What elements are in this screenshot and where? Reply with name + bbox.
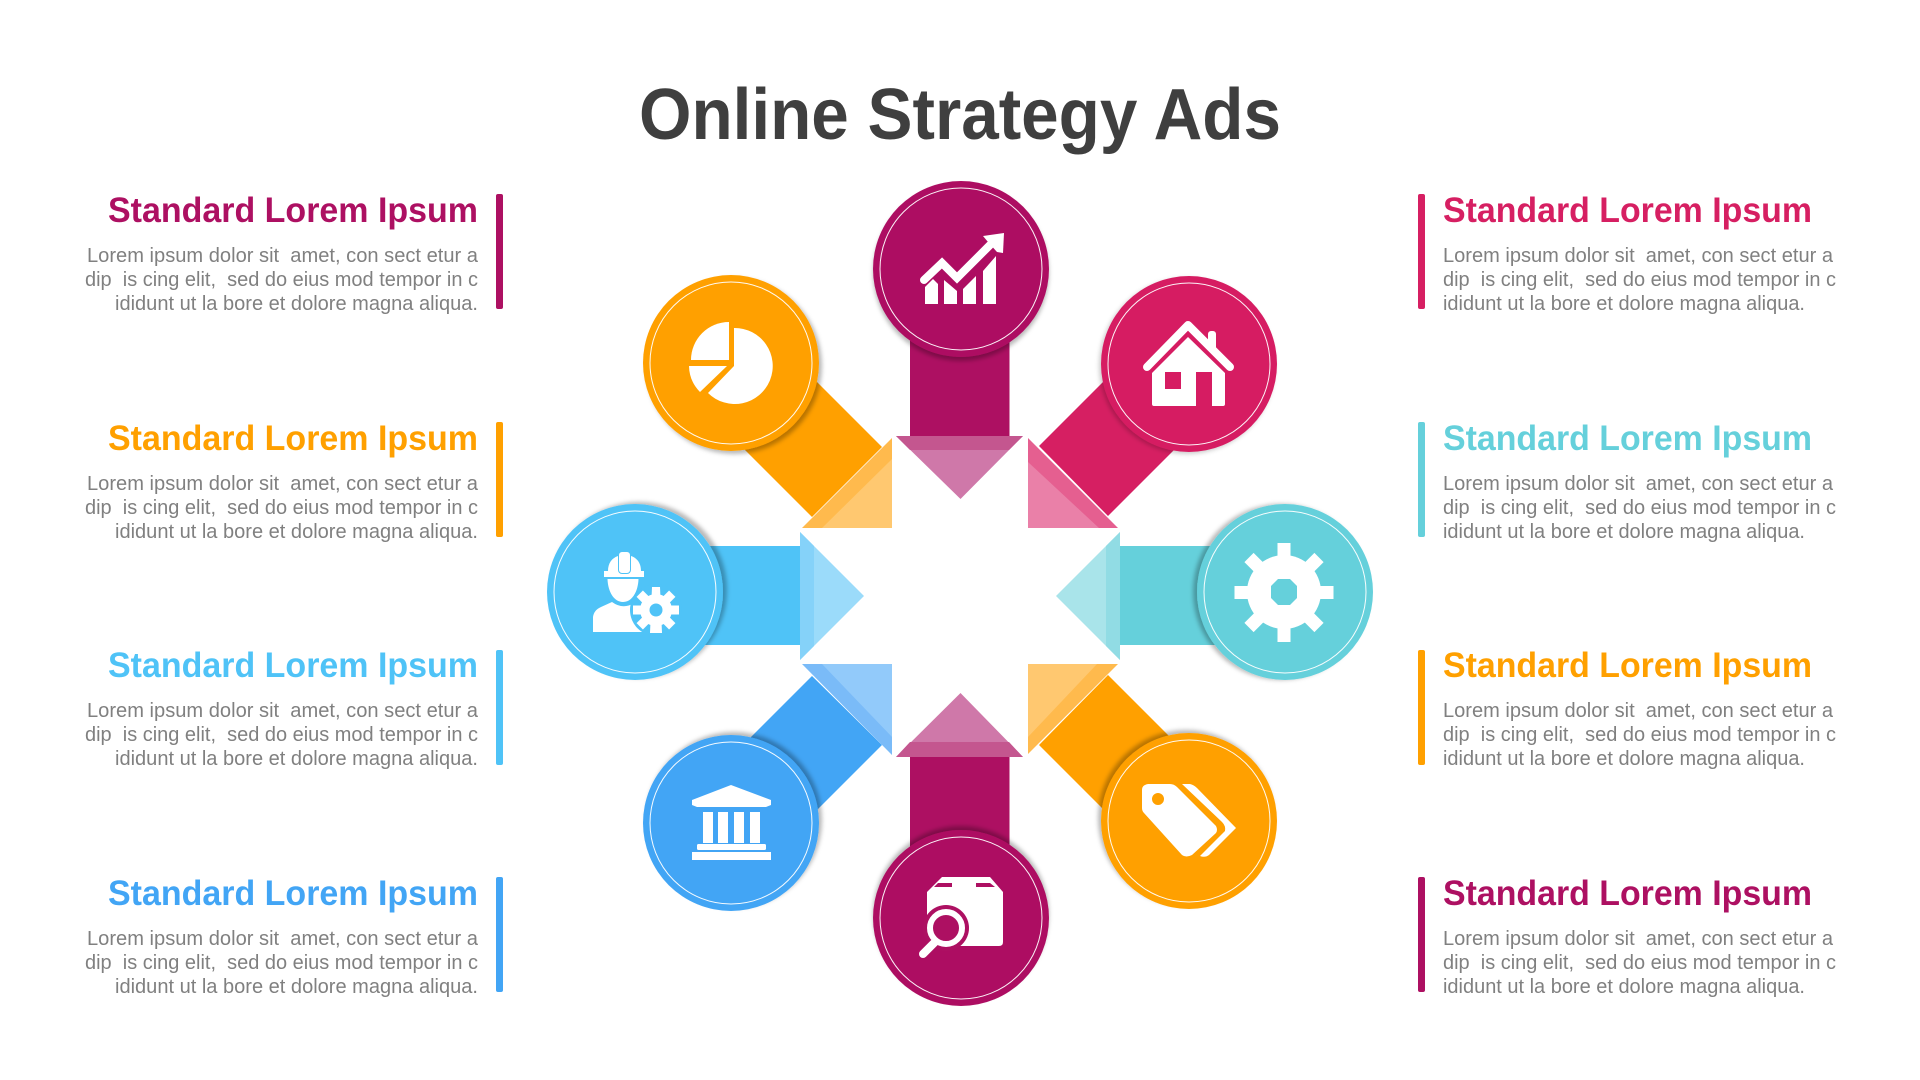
- text block: left 3: Standard Lorem Ipsum: [108, 646, 478, 685]
- bar: left: [680, 546, 800, 645]
- text block: left 2: dip is cing elit, sed do eius mod tempor in c: [85, 497, 478, 519]
- title: Online Strategy Ads: [639, 75, 1281, 155]
- panel: spoke bottom (magenta box search): [873, 693, 1049, 1006]
- icon: package with magnifier: [923, 877, 1003, 954]
- text block: right 4: Standard Lorem Ipsum: [1443, 874, 1812, 913]
- panel: spoke top-right (pink house): [1028, 276, 1277, 528]
- badge: top-right circle: [1101, 276, 1277, 452]
- bar: right: [1120, 546, 1240, 645]
- panel: spoke top-left (orange pie): [643, 275, 892, 528]
- badge: top circle: [873, 181, 1049, 357]
- text block: right 2: Standard Lorem Ipsum: [1443, 419, 1812, 458]
- arrow: top-right corner: [1028, 438, 1118, 528]
- bar: bottom: [910, 757, 1010, 887]
- text block: right 3: [1418, 646, 1836, 770]
- text block: left 1: [85, 191, 503, 315]
- icon: worker with gear: [593, 552, 682, 636]
- badge: bottom circle: [873, 830, 1049, 1006]
- text block: right 3: Lorem ipsum dolor sit amet, con sect etur a: [1443, 700, 1834, 722]
- text block: right 1: Standard Lorem Ipsum: [1443, 191, 1812, 230]
- text block: left 4: Standard Lorem Ipsum: [108, 874, 478, 913]
- text block: left 4: dip is cing elit, sed do eius mod tempor in c: [85, 952, 478, 974]
- text block: left 2: [85, 419, 503, 543]
- arrow: right, pointing left: [1056, 532, 1120, 660]
- panel: spoke right (cyan gear): [1056, 504, 1373, 680]
- text block: right 1: [1418, 191, 1836, 315]
- text block: left 2: Lorem ipsum dolor sit amet, con sect etur a: [87, 473, 479, 495]
- bar: top-left: [712, 347, 882, 517]
- text block: left 4: Lorem ipsum dolor sit amet, con sect etur a: [87, 928, 479, 950]
- text block: right 2: ididunt ut la bore et dolore magna aliqua.: [1443, 521, 1805, 543]
- text block: left 1: Lorem ipsum dolor sit amet, con sect etur a: [87, 245, 479, 267]
- text block: left 2: Standard Lorem Ipsum: [108, 419, 478, 458]
- bar: bottom-right: [1039, 675, 1208, 845]
- text block: left 3: [85, 646, 503, 770]
- panel: spoke bottom-left (blue bank): [643, 664, 892, 911]
- arrow: bottom-right corner: [1028, 664, 1118, 754]
- icon: house: [1147, 325, 1230, 406]
- text block: left 3: Lorem ipsum dolor sit amet, con sect etur a: [87, 700, 479, 722]
- arrow: left, pointing right: [800, 532, 864, 660]
- text block: left 3: dip is cing elit, sed do eius mod tempor in c: [85, 724, 478, 746]
- text block: right 2: [1418, 419, 1836, 543]
- text block: right 3: ididunt ut la bore et dolore magna aliqua.: [1443, 748, 1805, 770]
- text block: right 1: ididunt ut la bore et dolore magna aliqua.: [1443, 293, 1805, 315]
- text block: left 3: ididunt ut la bore et dolore magna aliqua.: [115, 748, 478, 770]
- badge: right circle: [1197, 504, 1373, 680]
- text block: left 2: ididunt ut la bore et dolore magna aliqua.: [115, 521, 478, 543]
- icon: rising chart: [924, 233, 1004, 304]
- text block: right 1: Lorem ipsum dolor sit amet, con sect etur a: [1443, 245, 1834, 267]
- text block: right 2: Lorem ipsum dolor sit amet, con sect etur a: [1443, 473, 1834, 495]
- text block: right 4: ididunt ut la bore et dolore magna aliqua.: [1443, 976, 1805, 998]
- text block: right 4: [1418, 874, 1836, 998]
- text block: right 4: dip is cing elit, sed do eius mod tempor in c: [1443, 952, 1836, 974]
- arrow: bottom-left corner: [802, 664, 892, 755]
- icon: bank building: [692, 785, 771, 860]
- badge: bottom-right circle: [1101, 733, 1277, 909]
- badge: left circle: [547, 504, 723, 680]
- panel: spoke left (sky worker): [547, 504, 864, 680]
- icon: gear: [1234, 543, 1334, 642]
- icon: price tags: [1142, 784, 1236, 857]
- text block: right 3: Standard Lorem Ipsum: [1443, 646, 1812, 685]
- badge: top-left circle: [643, 275, 819, 451]
- text block: right 1: dip is cing elit, sed do eius mod tempor in c: [1443, 269, 1836, 291]
- bar: top: [910, 300, 1010, 436]
- arrow: top, pointing down: [896, 436, 1023, 499]
- bar: bottom-left: [712, 676, 882, 845]
- bar: top-right: [1039, 346, 1208, 516]
- panel: spoke top (magenta chart): [873, 181, 1049, 499]
- text block: right 3: dip is cing elit, sed do eius mod tempor in c: [1443, 724, 1836, 746]
- text block: left 4: ididunt ut la bore et dolore magna aliqua.: [115, 976, 478, 998]
- text block: right 2: dip is cing elit, sed do eius mod tempor in c: [1443, 497, 1836, 519]
- text block: left 1: Standard Lorem Ipsum: [108, 191, 478, 230]
- icon: pie chart: [689, 322, 773, 404]
- arrow: bottom, pointing up: [896, 693, 1023, 757]
- badge: bottom-left circle: [643, 735, 819, 911]
- text block: left 1: ididunt ut la bore et dolore magna aliqua.: [115, 293, 478, 315]
- text block: left 4: [85, 874, 503, 998]
- arrow: top-left corner: [802, 438, 892, 528]
- text block: left 1: dip is cing elit, sed do eius mod tempor in c: [85, 269, 478, 291]
- text block: right 4: Lorem ipsum dolor sit amet, con sect etur a: [1443, 928, 1834, 950]
- panel: spoke bottom-right (orange tag): [1028, 664, 1277, 909]
